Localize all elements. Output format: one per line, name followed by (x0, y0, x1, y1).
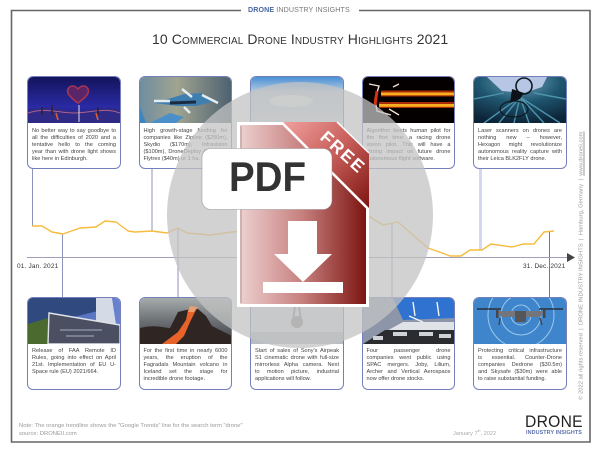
card text: tentative hello to the coming (32, 142, 116, 148)
card text: vision pilot. This will have a (366, 142, 450, 148)
title: 10 Commercial Drone Industry Highlights 2021 (152, 31, 448, 47)
download arrow (263, 221, 343, 293)
card text: No better way to say goodbye to (32, 128, 116, 134)
card text (255, 348, 339, 382)
card text: to motion picture, industrial (255, 369, 339, 375)
footnote (19, 423, 243, 437)
card text: autonomous reality capture with (478, 149, 562, 155)
card: FAA rules (27, 296, 120, 390)
card text (478, 348, 562, 382)
card text: applications will follow. (255, 376, 311, 382)
card text: new sensors reach the market (255, 142, 339, 148)
card text: Four passenger drone (366, 348, 450, 354)
card text: year than with drone light shows (32, 149, 116, 155)
grey circle (167, 82, 433, 348)
card text: Hexagon might revolutionize (478, 142, 562, 148)
FREE ribbon (283, 122, 369, 208)
card text: nothing new – however, (478, 135, 562, 141)
card text: SPAC mergers. Joby, Lilium, (366, 362, 450, 368)
card text: mirrorless Alpha camera. Next (255, 362, 339, 368)
start date label: 01. Jan. 2021 (17, 262, 58, 270)
card text: autonomous flight software. (366, 156, 435, 162)
card text: now offer drone stocks. (366, 376, 424, 382)
card text (144, 128, 228, 162)
logo subline: INDUSTRY INSIGHTS (526, 430, 582, 436)
card text: is essential. Counter-Drone (478, 355, 562, 361)
card: passenger drones (362, 296, 455, 390)
header label: DRONE INDUSTRY INSIGHTS (248, 6, 350, 14)
document icon (238, 124, 368, 306)
card: counter-drone (473, 296, 566, 390)
card text: flight keep getting better while (255, 135, 339, 141)
card text: For the first time in nearly 6000 (144, 348, 228, 354)
card: laser scanners (473, 76, 566, 169)
card text: ($100m), DroneDeploy ($50m) & (144, 149, 228, 155)
card text: High growth-stage funding for (144, 128, 228, 134)
card text: companies went public using (366, 355, 450, 361)
date of publication: January 7th, 2022 (453, 429, 496, 436)
card text: to raise substantial funding. (478, 376, 546, 382)
footnote: Note: The orange trendline shows the "Google Trends" line for the search term "drone" (19, 423, 243, 429)
card: cinematic drone sky (250, 76, 344, 169)
card text: Flytrex ($40m) or 1 ha. (144, 156, 200, 162)
footnote: source: DRONEII.com (19, 431, 77, 437)
card: light shows (27, 76, 120, 169)
card text: Iceland set the stage for (144, 369, 228, 375)
card text: Skydio ($170m), Infravision (144, 142, 228, 148)
time axis (27, 253, 575, 262)
card: algorithm beats pilot (362, 76, 455, 169)
card text (366, 348, 450, 382)
card text: Start of sales of Sony's Airpeak (255, 348, 339, 354)
card: Sony Airpeak (250, 296, 344, 390)
card text: Protecting critical infrastructure (478, 348, 562, 354)
card text: like here in Edinburgh. (32, 156, 88, 162)
card text: companies like Zipline ($250m), (144, 135, 228, 141)
PDF label: PDF (229, 153, 306, 200)
logo wordmark: DRONE (525, 412, 583, 431)
card text: incredible drone footage. (144, 376, 205, 382)
card text (144, 348, 228, 382)
card text: years, the eruption of the (144, 355, 228, 361)
card: funding (138, 76, 232, 169)
card text (32, 348, 116, 375)
card text: Algorithm beats human pilot for (366, 128, 450, 134)
card text: all the difficulties of 2020 and a (32, 135, 116, 141)
card text: strong impact on future drone (366, 149, 450, 155)
card text (478, 128, 562, 162)
card text: their Leica BLK2FLY drone. (478, 156, 546, 162)
card text: companies Dedrone ($30.5m) (478, 362, 562, 368)
FREE ribbon: FREE (317, 127, 369, 176)
card text (32, 128, 116, 162)
card text: the first time: a racing drone (366, 135, 450, 141)
connector lines (32, 168, 550, 297)
card text: and change how the industry (255, 149, 339, 155)
card text: Release of FAA Remote ID (32, 348, 116, 354)
card text: Fagradals Mountain volcano in (144, 362, 228, 368)
card text (255, 128, 339, 163)
logo (525, 412, 583, 436)
card text: works day to day. (255, 156, 298, 162)
card text: Laser scanners on drones are (478, 128, 562, 134)
card text: Archer and Vertical Aerospace (366, 369, 450, 375)
card text: 21st. Implementation of EU U- (32, 362, 116, 368)
orange trendline (32, 217, 554, 256)
card: volcano (138, 296, 232, 390)
end date label: 31. Dec. 2021 (523, 262, 565, 270)
card text: Rules, going into effect on April (32, 355, 116, 361)
PDF label (202, 148, 332, 210)
side copyright text: © 2022 all rights reserved | DRONE INDUSTRY INSIGHTS | Hamburg, Germany | www.droneii.com (578, 131, 584, 400)
card text: S1 cinematic drone with full-size (255, 355, 339, 361)
card text (366, 128, 450, 162)
card text: and Skysafe ($30m) were able (478, 369, 562, 375)
card text: Space rule (EU) 2021/664. (32, 369, 98, 375)
card text: Racing drones and autonomous (255, 128, 339, 134)
